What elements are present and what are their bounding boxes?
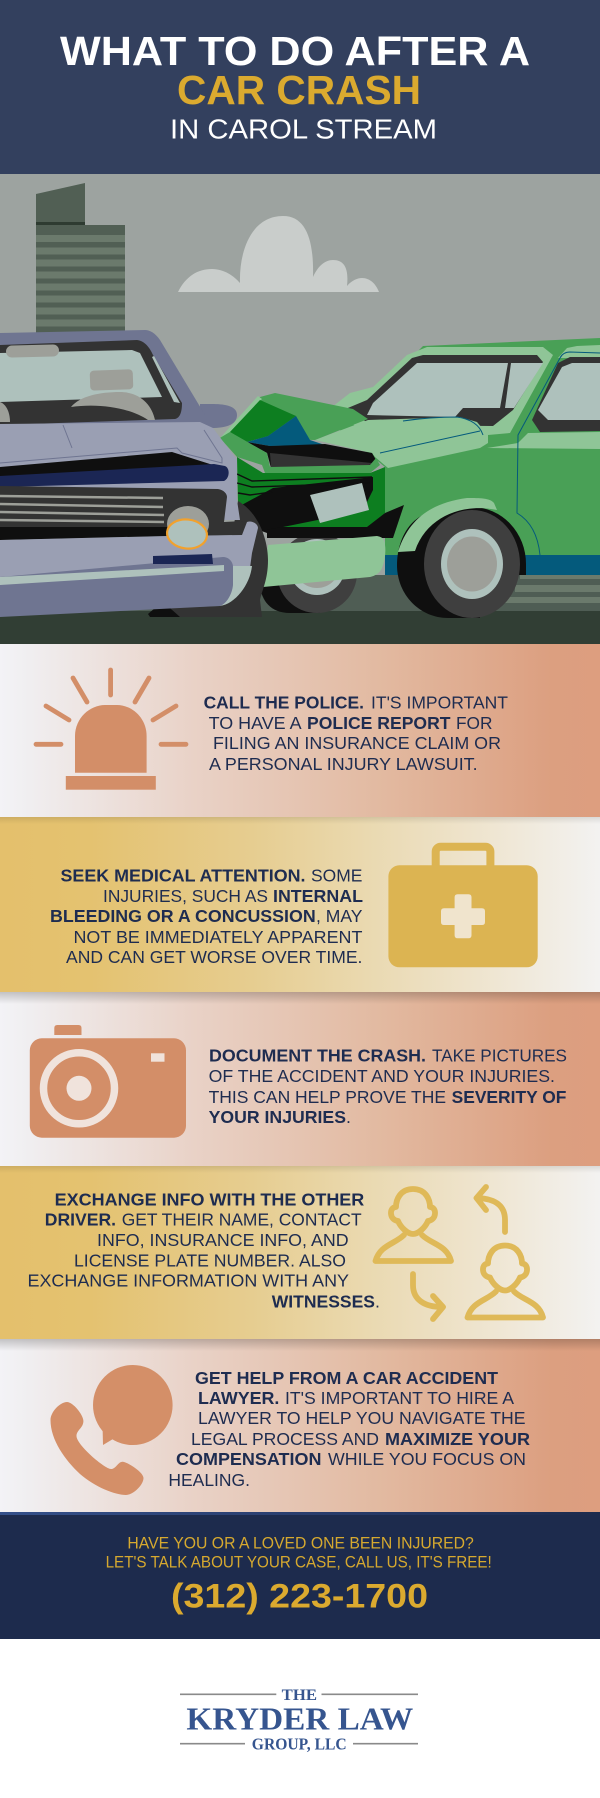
hood xyxy=(315,417,488,468)
text: exchange info: . xyxy=(375,1292,380,1312)
text: hire a lawyer: LEGAL PROCESS AND xyxy=(191,1429,379,1449)
cloud xyxy=(178,216,379,292)
icon: phone with speech bubble xyxy=(50,1365,173,1495)
front bumper xyxy=(263,536,385,587)
text: document the crash: OF THE ACCIDENT AND YOUR INJURIES. xyxy=(209,1066,555,1086)
tire xyxy=(170,501,268,617)
text: hire a lawyer: LAWYER TO HELP YOU NAVIGATE THE xyxy=(198,1408,526,1428)
text: medical attention xyxy=(50,866,363,967)
icon: siren xyxy=(36,670,186,790)
text: medical attention: , MAY xyxy=(316,906,363,926)
text: exchange info: DRIVER. xyxy=(45,1210,116,1230)
text: document the crash: YOUR INJURIES xyxy=(209,1107,346,1127)
text: medical attention: BLEEDING OR A CONCUSSION xyxy=(50,906,316,926)
text: hire a lawyer: IT'S IMPORTANT TO HIRE A xyxy=(285,1388,514,1408)
phone number: (312) 223-1700 xyxy=(171,1577,428,1615)
text: medical attention: INTERNAL xyxy=(273,886,363,906)
text: call the police: A PERSONAL INJURY LAWSUIT. xyxy=(209,754,478,774)
text: hire a lawyer: LAWYER. xyxy=(198,1388,279,1408)
text: document the crash: THIS CAN HELP PROVE THE xyxy=(209,1087,446,1107)
text: call the police: TO HAVE A xyxy=(209,713,302,733)
text: document the crash: . xyxy=(346,1107,351,1127)
title line 1: WHAT TO DO AFTER A xyxy=(60,28,530,74)
call to action text xyxy=(106,1534,492,1571)
rear wheel xyxy=(424,510,520,618)
icon: two people exchanging xyxy=(376,1187,543,1319)
title line 2: CAR CRASH xyxy=(177,67,421,113)
step 5: hire a lawyer xyxy=(0,1339,600,1512)
text: exchange info: GET THEIR NAME, CONTACT xyxy=(122,1210,362,1230)
text: call the police xyxy=(204,692,508,774)
text: document the crash: DOCUMENT THE CRASH. xyxy=(209,1046,426,1066)
icon: medical kit xyxy=(388,847,538,967)
text: exchange info xyxy=(28,1190,380,1312)
call to action text: LET'S TALK ABOUT YOUR CASE, CALL US, IT'S FREE! xyxy=(106,1553,492,1571)
rear tire back xyxy=(397,510,480,618)
text: medical attention: INJURIES, SUCH AS xyxy=(103,886,268,906)
crash scene illustration xyxy=(0,174,600,644)
step 1: call the police xyxy=(0,644,600,817)
text: hire a lawyer xyxy=(168,1368,530,1490)
bumper xyxy=(0,521,258,577)
text: hire a lawyer: MAXIMIZE YOUR xyxy=(385,1429,530,1449)
subtitle: IN CAROL STREAM xyxy=(170,114,437,145)
wheel arch xyxy=(418,507,526,575)
call to action footer xyxy=(0,1512,600,1639)
text: exchange info: INFO, INSURANCE INFO, AND xyxy=(97,1230,349,1250)
text: exchange info: EXCHANGE INFORMATION WITH ANY xyxy=(28,1271,349,1291)
step 3: document the crash xyxy=(0,992,600,1166)
step 2: seek medical attention xyxy=(0,817,600,992)
icon: camera xyxy=(30,1025,186,1138)
text: exchange info: EXCHANGE INFO WITH THE OTHER xyxy=(55,1190,364,1210)
text: hire a lawyer: WHILE YOU FOCUS ON xyxy=(328,1449,526,1469)
headlight xyxy=(166,506,209,551)
text: call the police: FOR xyxy=(456,713,493,733)
grille xyxy=(0,486,243,540)
text: hire a lawyer: GET HELP FROM A CAR ACCIDENT xyxy=(195,1368,498,1388)
logo: GROUP, LLC xyxy=(252,1734,347,1753)
text: call the police: CALL THE POLICE. xyxy=(204,692,364,712)
logo: KRYDER LAW xyxy=(186,1700,413,1736)
text: medical attention: SOME xyxy=(311,866,363,886)
text: medical attention: NOT BE IMMEDIATELY APPARENT xyxy=(74,927,363,947)
text: exchange info: WITNESSES xyxy=(272,1292,375,1312)
building xyxy=(36,183,125,335)
text: call the police: IT'S IMPORTANT xyxy=(371,692,508,712)
header banner xyxy=(0,0,600,174)
text: call the police: FILING AN INSURANCE CLAIM OR xyxy=(213,733,501,753)
front wheel xyxy=(260,533,357,613)
gray car xyxy=(0,330,268,617)
green car xyxy=(220,338,600,618)
logo xyxy=(180,1687,418,1753)
text: hire a lawyer: COMPENSATION xyxy=(176,1449,322,1469)
hood xyxy=(0,422,240,520)
logo: THE xyxy=(282,1687,317,1704)
call to action text: HAVE YOU OR A LOVED ONE BEEN INJURED? xyxy=(127,1534,474,1552)
text: hire a lawyer: HEALING. xyxy=(168,1470,250,1490)
road xyxy=(0,575,600,644)
text: exchange info: LICENSE PLATE NUMBER. ALSO xyxy=(74,1251,346,1271)
text: call the police: POLICE REPORT xyxy=(307,713,451,733)
text: document the crash: TAKE PICTURES xyxy=(432,1046,567,1066)
fender xyxy=(398,498,497,552)
text: document the crash xyxy=(209,1046,567,1127)
step 4: exchange info xyxy=(0,1166,600,1339)
text: medical attention: AND CAN GET WORSE OVER TIME. xyxy=(66,947,362,967)
text: document the crash: SEVERITY OF xyxy=(452,1087,567,1107)
text: medical attention: SEEK MEDICAL ATTENTION. xyxy=(60,866,306,886)
